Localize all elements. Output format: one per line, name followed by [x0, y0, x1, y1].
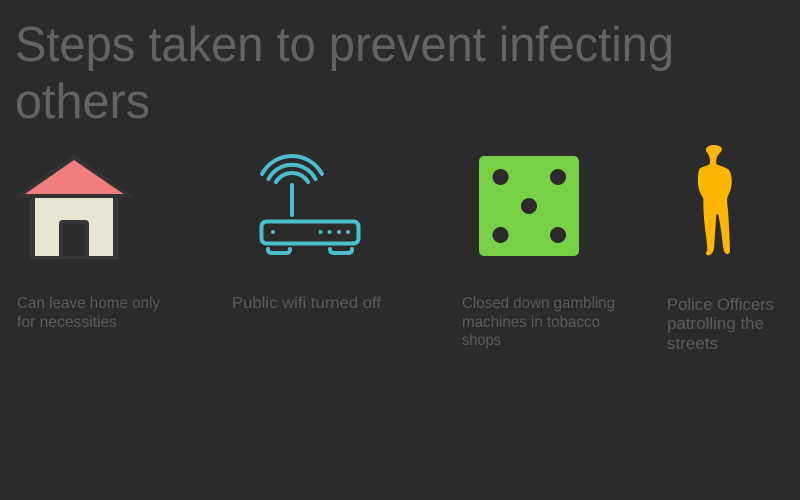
text: gambling machines — [462, 295, 615, 349]
text: police officers: patrolling the — [667, 315, 764, 333]
panel: stay at home — [17, 156, 160, 331]
panel: police officers — [667, 145, 774, 353]
text: gambling machines: machines in tobacco — [462, 314, 600, 331]
text: police officers: streets — [667, 335, 718, 353]
text: can leave home: Can leave home only — [17, 295, 160, 312]
text: gambling machines: shops — [462, 332, 501, 349]
title: Steps taken to prevent infecting — [15, 18, 674, 72]
title: others — [15, 75, 150, 129]
panel: gambling machines — [462, 156, 615, 349]
text: public wifi: Public wifi turned off — [232, 295, 382, 312]
text: police officers: Police Officers — [667, 296, 774, 314]
title — [15, 18, 674, 129]
text: police officers — [667, 296, 774, 353]
icon: dice — [479, 156, 579, 256]
icon: police officer silhouette — [698, 145, 732, 255]
panel: public wifi — [232, 156, 382, 312]
icon: wifi router — [262, 156, 358, 253]
text: gambling machines: Closed down gambling — [462, 295, 615, 312]
icon: house — [18, 156, 130, 259]
text: can leave home — [17, 295, 160, 331]
text: can leave home: for necessities — [17, 314, 117, 331]
